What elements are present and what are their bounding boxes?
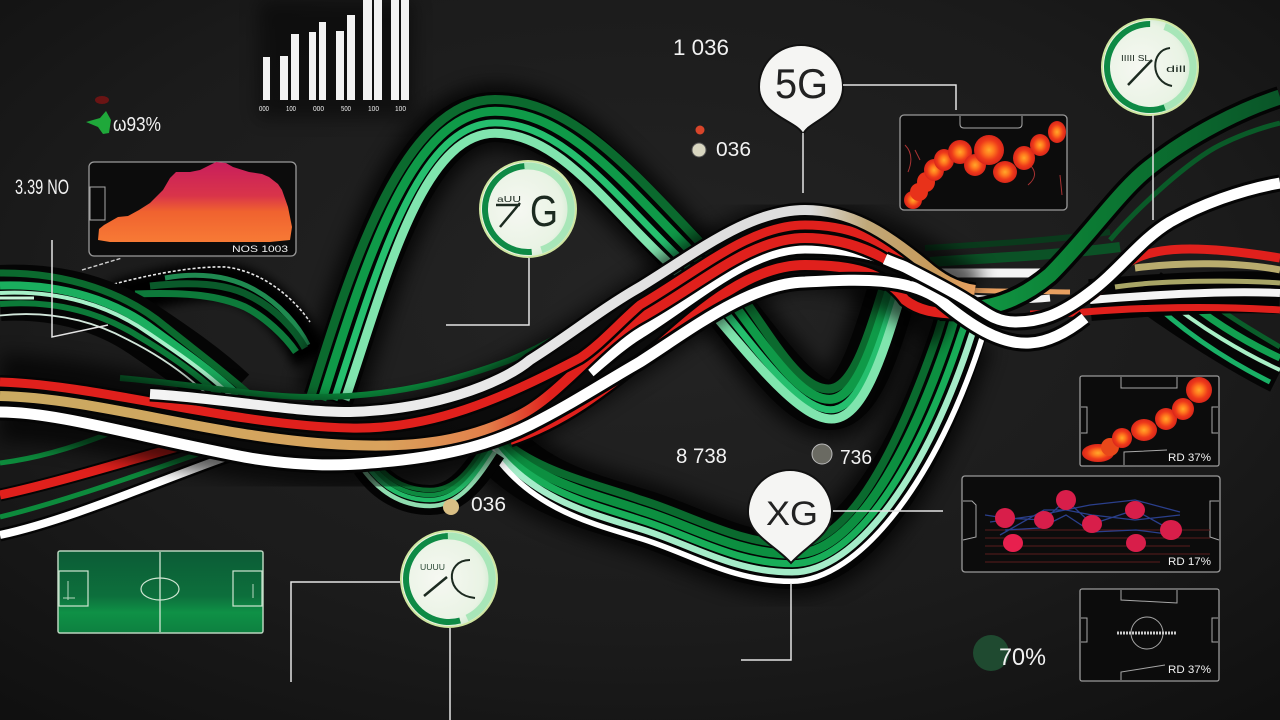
- connector: bottom badge stem: [449, 628, 451, 720]
- pin: xG: [748, 470, 832, 563]
- ribbon: main green arch and V: [310, 100, 901, 419]
- panel: top heat map: [900, 115, 1067, 210]
- icon: green dot with 70% label: [973, 635, 1046, 671]
- ribbon: right red, tan and white strands: [1030, 249, 1280, 316]
- label: 3.39: 3.39 NO: [15, 176, 69, 199]
- ribbon: small green U loop: [360, 445, 495, 506]
- ribbon: lower left strands: [0, 433, 232, 535]
- connector: from centre left badge: [446, 258, 529, 325]
- badge: centre left 7G: [480, 161, 576, 257]
- badge: bottom centre: [396, 526, 502, 632]
- badge: centre left 7G: G: [530, 187, 558, 236]
- badge: top right 7C: dill: [1166, 64, 1186, 74]
- icon: grey dot with 736 label: 736: [840, 447, 872, 469]
- panel: area chart on pitch: [89, 162, 296, 256]
- panel: network of red dots: RD 17%: [1168, 556, 1211, 568]
- icon: grey dot with 736 label: [812, 444, 872, 469]
- bar chart: 100: [395, 106, 406, 113]
- connector: bottom badge left elbow: [291, 582, 400, 682]
- pin: 5G: 5G: [775, 60, 828, 107]
- panel: green pitch: [58, 551, 263, 633]
- panel: area chart on pitch: NOS 1003: [232, 244, 288, 254]
- bar chart: [258, 0, 414, 118]
- connector: 5G stem: [802, 133, 804, 193]
- badge: top right 7C: [1095, 12, 1205, 122]
- badge: centre left 7G: aUU: [497, 195, 521, 204]
- label: 8 738: 8 738: [676, 445, 727, 468]
- pin: xG: XG: [766, 495, 818, 533]
- icon: cream dot with 036 label: 036: [471, 494, 506, 516]
- connector: xG to right panel: [833, 510, 943, 512]
- icon: small dots with 036 label: [692, 126, 751, 161]
- ribbon: main red, white and tan bundle: [0, 183, 1280, 465]
- ribbon: left green wave: [0, 273, 250, 395]
- connector: 5G to heat panel: [843, 85, 956, 110]
- panel: network of red dots: [962, 476, 1220, 572]
- ribbon: lower green wave: [491, 300, 991, 581]
- connector: left elbow line: [52, 240, 108, 337]
- badge: top right 7C: IIIII SL: [1121, 54, 1151, 63]
- bar chart: 000: [313, 106, 324, 113]
- panel: empty pitch: [1080, 589, 1219, 681]
- ribbon: right rising green: [940, 97, 1280, 310]
- icon: cream dot with 036 label: [443, 494, 506, 516]
- connector: xG stem elbow: [741, 583, 791, 660]
- ribbon: back left dark green bundle: [82, 258, 312, 359]
- panel: empty pitch: RD 37%: [1168, 664, 1211, 676]
- panel: right heat map: RD 37%: [1168, 452, 1211, 464]
- bar chart: 500: [341, 106, 351, 113]
- label: 1 036: 1 036: [673, 35, 729, 60]
- ribbon: thin top green strand: [120, 285, 640, 397]
- bar chart: 000: [259, 106, 269, 113]
- bar chart: 100: [286, 106, 296, 113]
- icon: small dots with 036 label: 036: [716, 139, 751, 161]
- badge: bottom centre: UUUU: [420, 563, 445, 572]
- pin: 5G: [759, 45, 843, 135]
- icon: rose and leaf with percentage: ω93%: [113, 114, 161, 136]
- icon: rose and leaf with percentage: [86, 96, 161, 136]
- ribbon: centre right horizontals: [925, 232, 1120, 300]
- icon: green dot with 70% label: 70%: [999, 644, 1046, 671]
- connector: top right badge stem: [1152, 115, 1154, 220]
- bar chart: 100: [368, 106, 379, 113]
- ribbon: lower right green bundle: [1145, 290, 1280, 382]
- panel: right heat map: [1080, 376, 1219, 466]
